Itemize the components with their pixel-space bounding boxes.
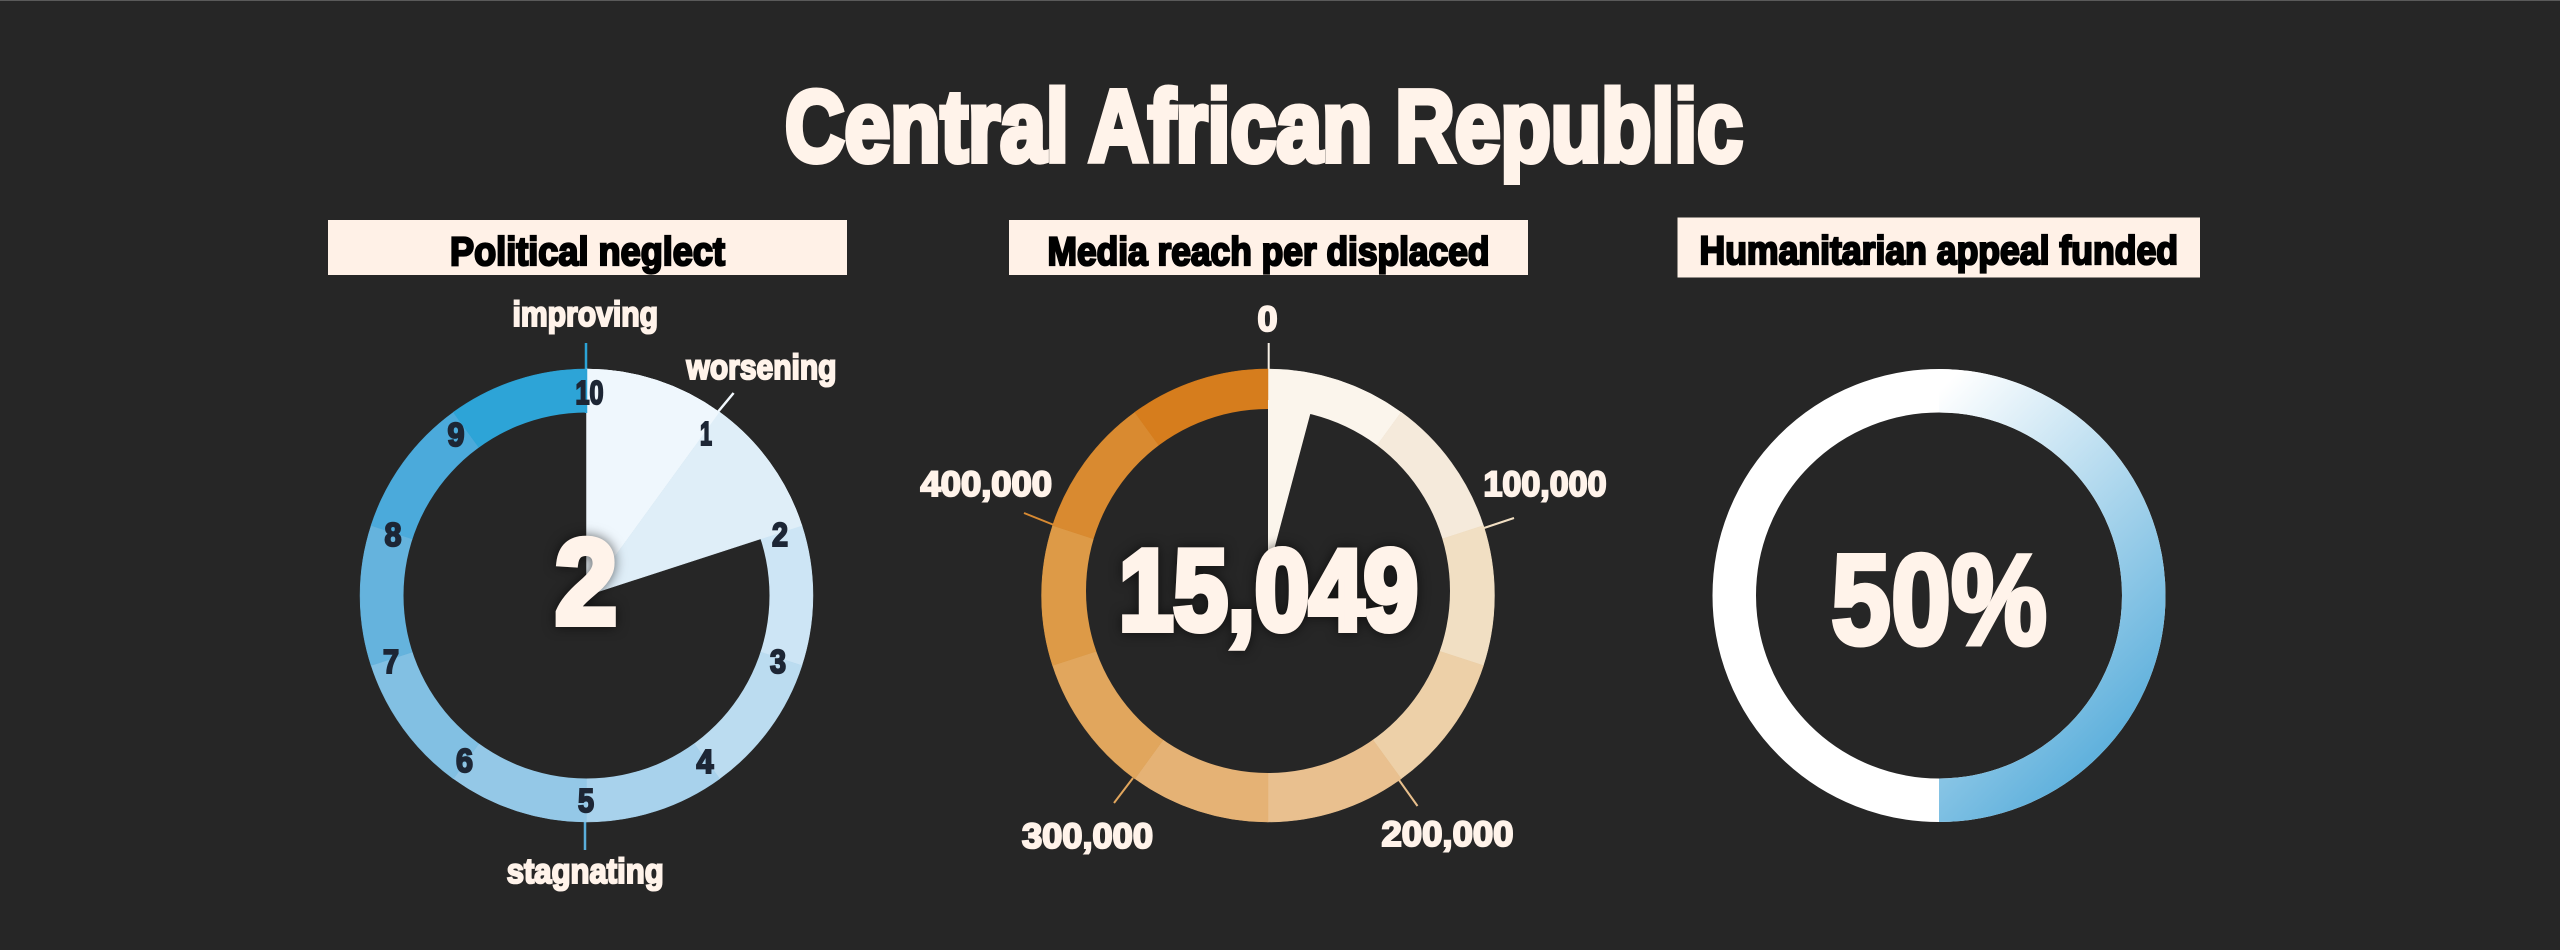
tick lines: media reach scale — [1024, 343, 1514, 806]
ring scale numbers: 7 — [383, 643, 399, 680]
ring scale numbers: 1 — [700, 415, 712, 452]
heading: political neglect: Political neglect — [450, 230, 725, 274]
heading: media reach per displaced: Media reach per displaced — [1048, 230, 1490, 274]
label: 100,000: 100,000 — [1484, 464, 1606, 504]
label: 400,000: 400,000 — [920, 464, 1052, 504]
panel: media reach per displaced — [920, 220, 1606, 857]
label: improving: improving — [512, 294, 658, 334]
label: stagnating: stagnating — [507, 851, 664, 891]
label: 200,000: 200,000 — [1382, 814, 1514, 854]
label: worsening: worsening — [686, 347, 836, 387]
ring scale numbers: 5 — [578, 782, 594, 819]
ring scale numbers: 10 — [576, 374, 604, 411]
panel: humanitarian appeal funded — [1678, 218, 2200, 800]
ring scale numbers: 2 — [772, 516, 788, 553]
value: political neglect score: 2 — [555, 514, 617, 650]
ring scale numbers: 4 — [696, 743, 714, 780]
title: Central African Republic — [785, 71, 1743, 183]
label: 0: 0 — [1258, 299, 1278, 339]
value: media reach: 15,049 — [1119, 528, 1418, 654]
ring gauge: appeal funded 50% — [1734, 391, 2144, 800]
ring scale numbers — [383, 374, 788, 819]
ring gauge: media reach — [1011, 334, 1525, 857]
value: appeal funded: 50% — [1831, 529, 2047, 672]
ring gauge: political neglect score 2 of 10 — [330, 334, 843, 857]
heading: humanitarian appeal funded — [1678, 218, 2200, 278]
panel: political neglect — [328, 220, 847, 891]
ring scale numbers: 6 — [456, 742, 473, 779]
tick lines: political neglect scale — [585, 343, 734, 850]
ring scale numbers: 9 — [448, 416, 464, 453]
label: 300,000: 300,000 — [1022, 816, 1153, 856]
heading: humanitarian appeal funded: Humanitarian appeal funded — [1700, 229, 2178, 273]
heading: political neglect — [328, 220, 847, 275]
ring scale numbers: 3 — [770, 643, 786, 680]
ring scale numbers: 8 — [384, 516, 402, 553]
